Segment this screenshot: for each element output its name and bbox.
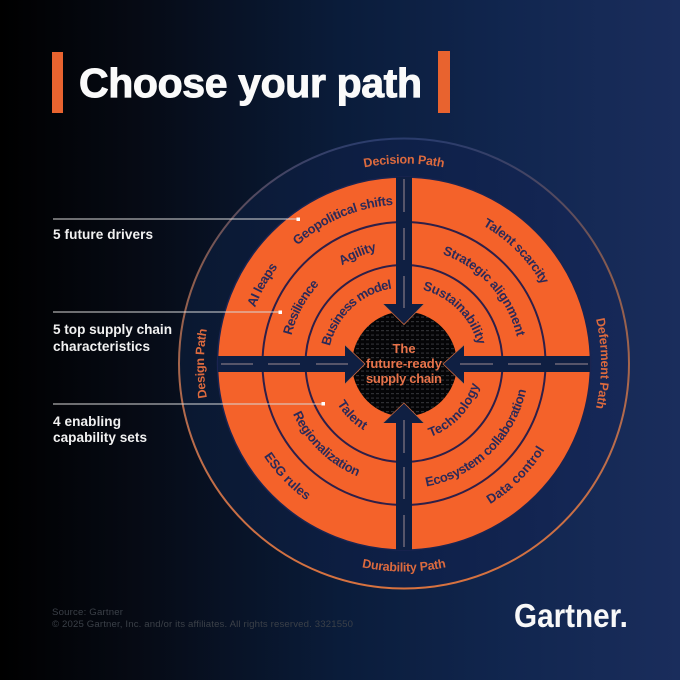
label: Regionalization: Regionalization	[293, 410, 359, 476]
label: Agility: Agility	[340, 244, 375, 266]
outer ring: paths	[179, 138, 629, 588]
path label: Decision Path: Decision Path	[364, 154, 444, 168]
callout: 4 enabling capability sets: capability sets	[53, 430, 147, 445]
arrow: right road	[443, 345, 590, 384]
path label: Durability Path: Durability Path	[362, 559, 446, 574]
callout: 4 enabling capability sets	[53, 402, 325, 445]
callout: 5 future drivers: 5 future drivers	[53, 227, 153, 242]
centre label: supply chain	[366, 371, 442, 386]
title: Choose your path	[79, 60, 422, 106]
label: Resilience: Resilience	[283, 281, 318, 335]
label: Talent scarcity: Talent scarcity	[485, 218, 548, 283]
label: Data control: Data control	[486, 445, 544, 504]
callout: 5 future drivers	[53, 218, 300, 242]
ring divider: inner	[306, 265, 502, 462]
path label: Design Path: Design Path	[195, 329, 207, 398]
label: Geopolitical shifts: Geopolitical shifts	[294, 196, 392, 244]
label: Talent: Talent	[338, 398, 368, 430]
arrow: top road	[383, 177, 424, 324]
label: Ecosystem collaboration: Ecosystem collaboration	[425, 390, 526, 486]
arrow: bottom road	[383, 403, 424, 550]
callout: 5 top supply chain characteristics: characteristics	[53, 339, 150, 354]
source note	[52, 607, 353, 630]
logo: Gartner wordmark: Gartner.	[514, 598, 628, 634]
path label: Deferment Path: Deferment Path	[596, 318, 609, 408]
arrow: left road	[218, 345, 365, 384]
centre label: The	[392, 341, 416, 356]
callout: 5 top supply chain characteristics: 5 top supply chain	[53, 322, 172, 337]
label: AI leaps: AI leaps	[248, 264, 277, 308]
title block	[52, 51, 450, 113]
label: ESG rules: ESG rules	[264, 452, 310, 500]
title left bar	[52, 52, 63, 113]
centre hub	[352, 312, 457, 416]
callout: 4 enabling capability sets: 4 enabling	[53, 414, 121, 429]
wheel diagram	[178, 138, 630, 590]
label: Business model: Business model	[321, 279, 392, 346]
callout: 5 top supply chain characteristics	[53, 310, 282, 354]
source note: Source: Gartner	[52, 607, 124, 618]
centre label: future-ready	[366, 356, 443, 371]
ring divider: middle	[262, 222, 546, 505]
source note: © 2025 Gartner, Inc. and/or its affiliates. All rights reserved. 3321550	[52, 619, 353, 630]
label: Technology: Technology	[427, 382, 480, 436]
label: Sustainability: Sustainability	[424, 282, 484, 343]
label: Strategic alignment: Strategic alignment	[444, 246, 525, 336]
title right bar	[438, 51, 450, 113]
orange disc	[218, 177, 590, 550]
